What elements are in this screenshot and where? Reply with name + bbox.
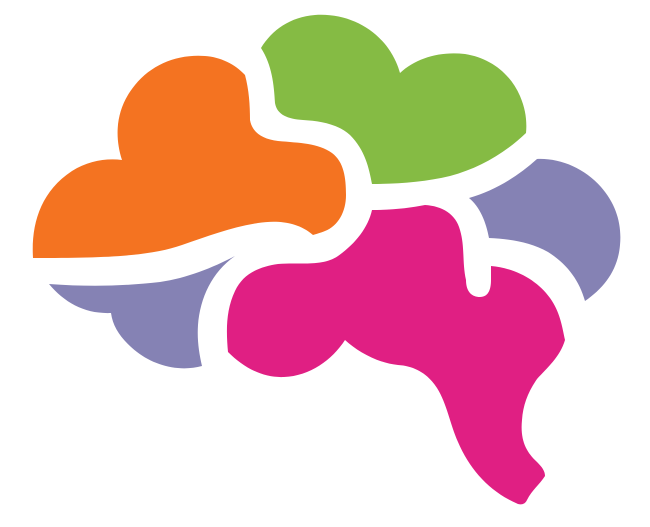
panel: orange frontal lobe xyxy=(33,56,346,258)
panel: magenta cerebellum and brain stem xyxy=(227,205,565,504)
panel: purple temporal lobe xyxy=(49,256,235,368)
panel: green parietal lobe xyxy=(261,15,526,184)
panel: purple occipital lobe xyxy=(469,159,620,301)
